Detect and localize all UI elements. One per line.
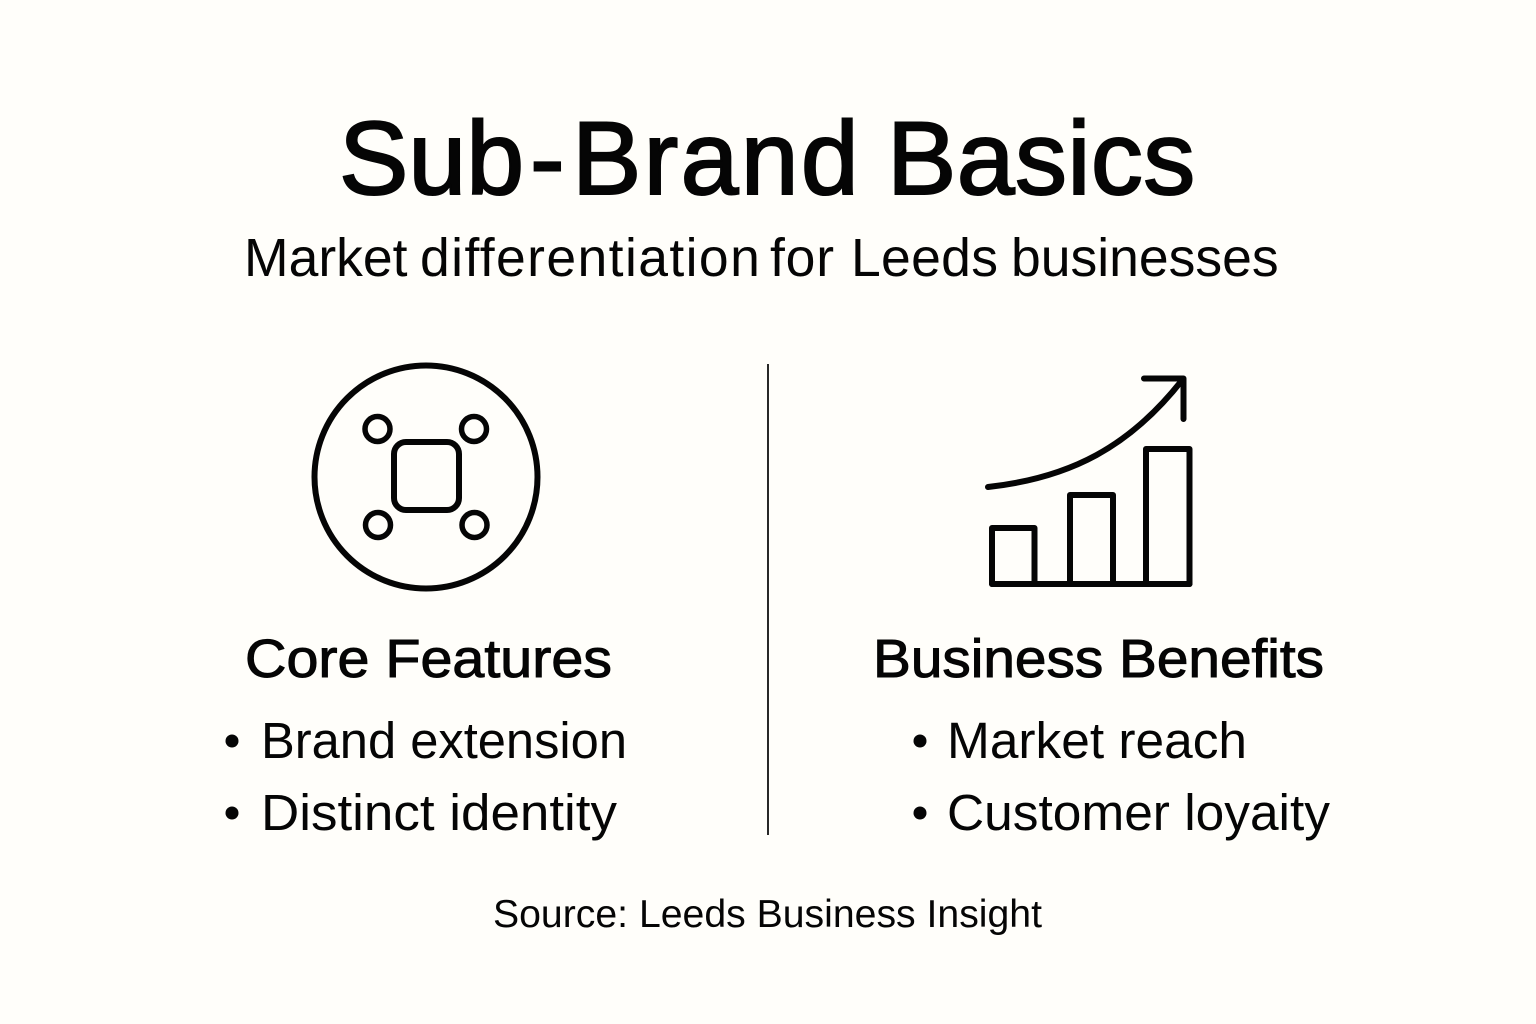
heading: core features: Core Features bbox=[245, 629, 612, 689]
subtitle: differentiation bbox=[420, 229, 761, 288]
title: Basics bbox=[887, 101, 1196, 217]
heading: business benefits: Business Benefits bbox=[873, 629, 1324, 689]
icon: circle with square and four nodes bbox=[314, 366, 538, 588]
subtitle: Leeds bbox=[851, 229, 998, 288]
subtitle: Market bbox=[244, 229, 408, 288]
subtitle: businesses bbox=[1011, 229, 1279, 288]
source note: Source: Leeds Business Insight bbox=[493, 893, 1042, 936]
title: Brand bbox=[572, 101, 861, 217]
panel: business benefits bbox=[873, 378, 1330, 841]
icon: rising bar chart with arrow bbox=[988, 378, 1190, 584]
list item: brand extension: Brand extension bbox=[261, 712, 627, 769]
list item: customer loyaity: Customer loyaity bbox=[947, 784, 1330, 841]
list item: distinct identity: Distinct identity bbox=[261, 784, 618, 841]
panel: core features bbox=[226, 366, 627, 841]
list item: market reach: Market reach bbox=[947, 712, 1247, 769]
subtitle: for bbox=[770, 229, 835, 288]
title: - bbox=[530, 101, 565, 217]
title: Sub bbox=[339, 101, 524, 217]
